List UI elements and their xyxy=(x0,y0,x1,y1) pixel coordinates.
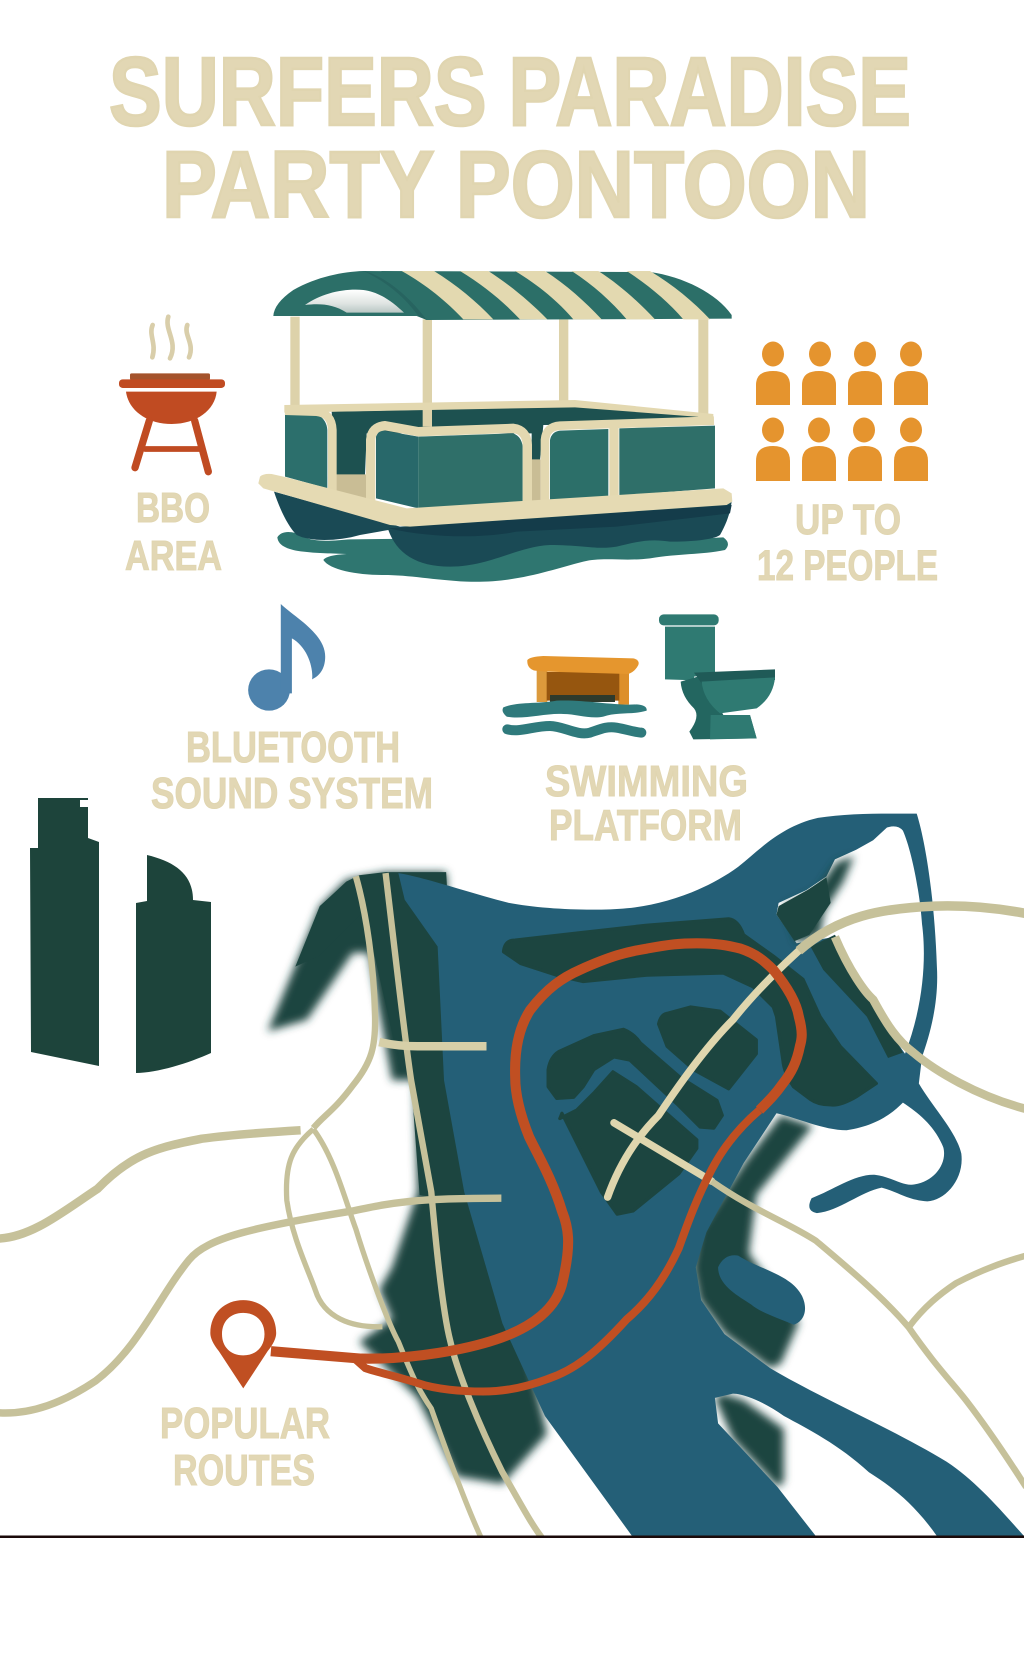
label: bluetooth sound system: SOUND SYSTEM xyxy=(151,769,433,818)
icon: toilet xyxy=(659,614,775,739)
baseline rule xyxy=(0,1536,1024,1538)
deck floor xyxy=(336,459,541,503)
icon: music note xyxy=(248,604,325,711)
water under boat xyxy=(277,532,728,582)
label: BBO area: AREA xyxy=(125,532,222,579)
roads xyxy=(0,873,1024,1540)
title xyxy=(109,37,911,238)
label: swimming platform xyxy=(545,757,748,850)
canopy roof xyxy=(273,271,732,320)
lid xyxy=(130,373,210,380)
icon: swimming platform xyxy=(503,656,647,733)
side panels xyxy=(285,413,715,508)
route map xyxy=(0,814,1024,1540)
label: bluetooth sound system xyxy=(151,723,433,818)
route: upper loop xyxy=(271,943,802,1359)
label: BBO area xyxy=(125,484,222,579)
bowl xyxy=(126,392,217,424)
road: east curve xyxy=(835,937,1024,1109)
rim xyxy=(119,379,225,388)
railings xyxy=(284,400,714,503)
blurred land shadow xyxy=(268,872,813,1487)
title: PARTY PONTOON xyxy=(162,132,870,238)
deck xyxy=(258,474,732,527)
icon: barbecue grill xyxy=(119,317,225,472)
river island xyxy=(718,1255,805,1325)
road: south-east highway xyxy=(712,1181,1024,1487)
label: popular routes: ROUTES xyxy=(173,1446,315,1495)
canopy stripes xyxy=(402,271,710,319)
dark islands xyxy=(504,919,876,1214)
label: up to 12 people xyxy=(757,496,938,590)
skyline towers xyxy=(30,798,211,1073)
label: up to 12 people: UP TO xyxy=(795,496,901,544)
canopy posts xyxy=(290,317,708,427)
label: BBO area: BBO xyxy=(136,484,210,531)
pontoon boat illustration xyxy=(258,271,732,582)
river xyxy=(398,814,1024,1536)
label: swimming platform: SWIMMING xyxy=(545,757,748,806)
dark triangle by road xyxy=(810,935,903,1058)
sharp peninsula xyxy=(295,872,467,1195)
roof shaded edge xyxy=(363,271,427,320)
road: west one xyxy=(0,1130,301,1239)
road: upper spur xyxy=(379,1042,487,1046)
inner bay cut-out xyxy=(776,826,924,1054)
road: coastal a xyxy=(313,876,375,1128)
label: up to 12 people: 12 PEOPLE xyxy=(757,542,938,590)
footer blank area xyxy=(0,1537,1024,1666)
label: popular routes xyxy=(160,1399,330,1495)
road: west two xyxy=(0,1198,501,1413)
popular route line xyxy=(271,943,802,1392)
road: north-east arc xyxy=(799,906,1024,951)
legs xyxy=(135,421,208,472)
road: south coastal xyxy=(313,1129,482,1540)
label: popular routes: POPULAR xyxy=(160,1399,330,1448)
road: east branch xyxy=(908,1256,1024,1328)
steam xyxy=(151,317,191,358)
label: swimming platform: PLATFORM xyxy=(549,801,742,850)
road: north-east diagonal xyxy=(608,951,799,1197)
road: cross diagonal xyxy=(614,1123,712,1181)
hull xyxy=(274,492,732,567)
icon: group of people xyxy=(756,342,928,481)
route: return leg xyxy=(356,1110,760,1392)
road: coastal b xyxy=(386,873,544,1540)
road: west loop xyxy=(286,1129,382,1327)
cabin interior xyxy=(332,407,698,475)
label: bluetooth sound system: BLUETOOTH xyxy=(186,723,400,772)
dark shore patch xyxy=(784,856,854,943)
canopy underside xyxy=(305,290,404,313)
icon: location pin xyxy=(210,1300,276,1388)
